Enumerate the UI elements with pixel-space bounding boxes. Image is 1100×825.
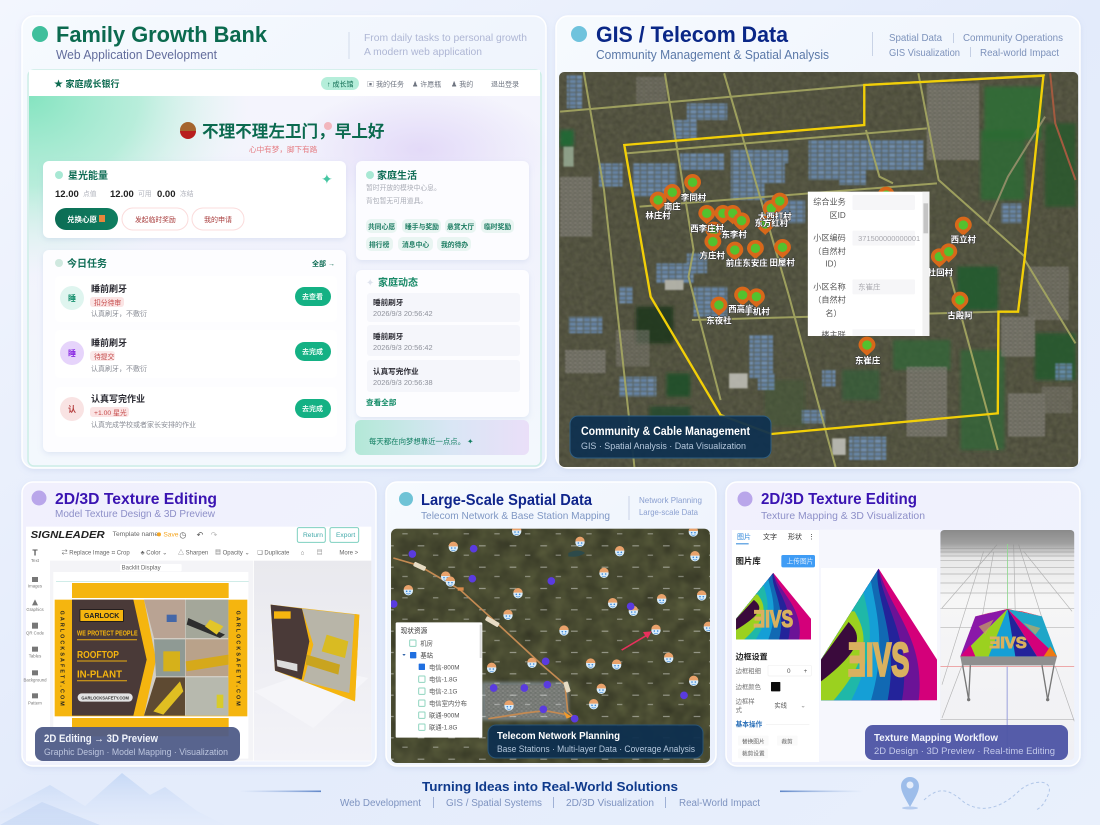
layer legend: 电信-1.8G xyxy=(429,674,458,683)
village labels: 大西打村 xyxy=(758,211,792,221)
village labels: 前庄 xyxy=(726,258,743,268)
info popup: 371500000000001 xyxy=(858,234,920,243)
icon: location pin with route xyxy=(901,777,1049,810)
side tools: Text xyxy=(31,558,40,563)
tags: Real-world Impact xyxy=(980,48,1059,59)
tags: Large-scale Data xyxy=(639,507,698,517)
editor toolbar: Template name xyxy=(113,531,158,538)
tags: Network Planning xyxy=(639,495,702,505)
card: 星光能量: 点值 xyxy=(83,189,97,198)
capability list xyxy=(340,797,760,809)
editor toolbar: ▦ Opacity ⌄ xyxy=(215,549,250,556)
card: 家庭动态: 家庭动态 xyxy=(378,276,418,289)
layer legend: 电信-2.1G xyxy=(429,686,458,695)
image library sidebar: 上传图片 xyxy=(787,556,813,565)
capability list: Real-World Impact xyxy=(679,798,760,809)
markers xyxy=(650,174,972,356)
card: 家庭动态 xyxy=(356,270,529,417)
side tools: Graphics xyxy=(26,607,44,612)
icon: purple dot xyxy=(32,490,46,506)
icon: teal dot xyxy=(399,492,413,506)
card: 家庭生活: 暂时开放的模块中心息。 xyxy=(366,183,441,192)
village labels: 方庄村 xyxy=(700,251,725,261)
greeting xyxy=(180,122,385,154)
layer legend: 联通-1.8G xyxy=(429,722,458,731)
poster: IN-PLANT xyxy=(77,670,122,681)
card: 家庭生活: 消息中心 xyxy=(402,240,429,249)
editor toolbar: ❏ Duplicate xyxy=(257,549,290,556)
card: 家庭生活: 我的待办 xyxy=(441,240,468,249)
layer legend: 现状资源 xyxy=(401,626,428,635)
footer xyxy=(0,773,1049,825)
info popup: 名） xyxy=(825,308,842,318)
arrow xyxy=(621,631,652,651)
village labels: 林庄村 xyxy=(645,211,671,221)
card: 星光能量: 冻结 xyxy=(180,189,194,198)
caption: 2D Editing → 3D Preview xyxy=(44,733,158,745)
image library sidebar: 裁剪设置 xyxy=(742,750,765,758)
card: 家庭生活: 睡手与奖励 xyxy=(405,222,439,231)
image library sidebar: 边框粗细 xyxy=(736,666,761,675)
info popup: 小区名称 xyxy=(813,281,846,291)
image library sidebar: 图片库 xyxy=(736,556,761,566)
caption: 2D Design · 3D Preview · Real-time Editing xyxy=(874,746,1055,757)
3D tent preview xyxy=(940,530,1074,760)
capability list: Web Development xyxy=(340,798,421,809)
map caption: Community & Cable Management xyxy=(581,426,750,438)
caption: Base Stations · Multi-layer Data · Coverage Analysis xyxy=(497,744,695,754)
card: 今日任务 xyxy=(43,250,346,452)
image library sidebar: + xyxy=(804,668,808,675)
image library sidebar: ⋮ xyxy=(808,534,815,541)
3D preview xyxy=(254,561,371,761)
app navbar: ♟ 许愿瓶 xyxy=(412,80,441,88)
panel: GIS / Telecom Data xyxy=(556,16,1080,468)
task 2: 待提交 xyxy=(94,352,115,361)
panel: 2D/3D Texture Editing (tent) xyxy=(726,482,1080,766)
tags xyxy=(628,495,702,520)
task 3: 认真写完作业 xyxy=(91,393,145,404)
caption: Telecom Network Planning xyxy=(497,730,620,742)
layer legend: 电信-800M xyxy=(429,662,460,671)
card: 星光能量 xyxy=(43,161,346,238)
editor toolbar: ↷ xyxy=(211,530,218,539)
heading: closing line: Turning Ideas into Real-World Solutions xyxy=(422,779,678,794)
card: 家庭生活: 背包暂无可用道具。 xyxy=(366,196,427,205)
task 2: 睡前刷牙 xyxy=(91,337,127,348)
info popup: （自然村 xyxy=(813,246,846,256)
canvas xyxy=(50,561,253,761)
editor toolbar: More > xyxy=(339,550,359,556)
task 3: 认 xyxy=(68,404,76,414)
app navbar xyxy=(29,70,540,96)
village labels: 东夜社 xyxy=(706,315,732,325)
village labels: 手机村 xyxy=(744,307,770,317)
village labels: 东崔庄 xyxy=(855,355,881,365)
tags: Spatial Data xyxy=(889,33,942,44)
editor toolbar: △ Sharpen xyxy=(178,548,208,556)
card: 星光能量: 12.00 xyxy=(55,189,79,200)
editor toolbar: ↶ xyxy=(197,530,204,539)
card: 家庭动态: 2026/9/3 20:56:42 xyxy=(373,343,433,352)
capability list: GIS / Spatial Systems xyxy=(446,798,542,809)
task 1: 扣分待审 xyxy=(94,298,121,307)
village labels: 东方红村 xyxy=(754,218,789,228)
description: From daily tasks to personal growth xyxy=(364,32,527,44)
decoration: mountains xyxy=(0,773,225,825)
village labels: 西立村 xyxy=(951,235,977,245)
card: 今日任务: 今日任务 xyxy=(67,257,107,270)
task 1: 睡前刷牙 xyxy=(91,283,127,294)
card: 星光能量: 12.00 xyxy=(110,189,134,200)
info popup: 小区编码 xyxy=(813,233,846,243)
card: 家庭动态: ✦ xyxy=(366,278,374,289)
banner xyxy=(355,420,529,455)
image library sidebar: 文字 xyxy=(763,532,777,541)
icon: blue dot xyxy=(571,26,587,42)
poster: GARLOCK xyxy=(84,611,120,620)
card: 家庭动态: 2026/9/3 20:56:38 xyxy=(373,378,433,387)
info popup: （自然村 xyxy=(813,295,846,305)
app navbar: ↑ 成长馆 xyxy=(327,80,353,88)
image library sidebar: 边框颜色 xyxy=(736,682,762,691)
village labels: 西高庄 xyxy=(728,304,754,314)
card: 星光能量: 星光能量 xyxy=(68,169,108,182)
image library sidebar: 边框样 xyxy=(736,696,755,705)
image library sidebar: 边框设置 xyxy=(736,652,768,662)
base stations xyxy=(404,526,713,711)
task 2: 去完成 xyxy=(302,347,323,356)
tags: Community Operations xyxy=(963,33,1063,44)
poster: GARLOCKSAFETY.COM xyxy=(59,611,65,706)
tags: GIS Visualization xyxy=(889,48,960,59)
app navbar: ♟ 我的 xyxy=(451,80,473,88)
task 3: +1.00 星光 xyxy=(94,408,127,417)
app navbar: ★ 家庭成长银行 xyxy=(54,78,120,89)
info popup: 区ID xyxy=(829,211,846,220)
editor toolbar: ⇄ Replace Image xyxy=(62,548,110,556)
info popup xyxy=(808,192,930,339)
caption: Texture Mapping Workflow xyxy=(874,732,999,744)
editor toolbar: Return xyxy=(303,532,323,539)
image library sidebar: 式 xyxy=(736,705,743,714)
image library sidebar: 实线 xyxy=(774,700,788,709)
app screenshot xyxy=(28,70,550,466)
village labels: 东李村 xyxy=(721,229,747,239)
card: 星光能量: 发起临时奖励 xyxy=(135,215,176,224)
boundary xyxy=(624,76,1043,434)
image library sidebar: 0 xyxy=(787,668,791,675)
side tools: T xyxy=(32,548,38,558)
layer legend: 联通-900M xyxy=(429,710,460,719)
flat texture xyxy=(821,568,937,701)
side tools: Tables xyxy=(29,654,41,659)
village labels: 东安庄 xyxy=(742,258,768,268)
editor toolbar: ♣ Color ⌄ xyxy=(141,550,167,556)
heading: 2D/3D Texture Editing xyxy=(55,491,217,508)
roads xyxy=(560,72,1076,467)
panel: Large-Scale Spatial Data xyxy=(386,482,716,766)
layer legend xyxy=(396,622,482,738)
card: 家庭动态: 2026/9/3 20:56:42 xyxy=(373,309,433,318)
heading: Large-Scale Spatial Data xyxy=(421,492,592,509)
poster xyxy=(55,583,247,736)
card: 家庭动态: 查看全部 xyxy=(366,397,397,407)
village labels: 李同村 xyxy=(681,193,707,203)
image library sidebar: 基本操作 xyxy=(736,720,763,729)
card: 家庭生活: 共同心愿 xyxy=(368,222,395,231)
image library sidebar: 替换图片 xyxy=(742,737,765,745)
roads xyxy=(393,558,575,719)
banner: 每天都在向梦想靠近一点点。 ✦ xyxy=(369,437,473,446)
village labels: 南庄 xyxy=(664,201,681,211)
editor screenshot: Backlit Display xyxy=(122,566,161,572)
subheading: Web Application Development xyxy=(56,48,217,62)
task 1: 睡 xyxy=(68,293,76,303)
editor toolbar: ◷ xyxy=(179,530,186,539)
village labels: 古殿阿 xyxy=(947,311,973,321)
task 3 xyxy=(55,387,337,437)
description xyxy=(364,32,527,58)
satellite map xyxy=(559,72,1078,467)
editor toolbar: Export xyxy=(336,532,355,539)
side tools: Images xyxy=(28,584,42,589)
editor toolbar: Save xyxy=(163,531,179,538)
card: 今日任务: 全部 → xyxy=(312,259,335,268)
caption xyxy=(865,725,1068,760)
tent canopy: ƎIVS xyxy=(989,635,1027,652)
capability list: 2D/3D Visualization xyxy=(566,798,654,809)
info popup: 楼主联 xyxy=(821,329,846,339)
subheading: Telecom Network & Base Station Mapping xyxy=(421,510,610,522)
greeting: 不理不理左卫门，早上好 xyxy=(202,122,385,141)
side tools xyxy=(23,548,47,706)
app navbar: 退出登录 xyxy=(491,80,519,88)
subheading: Model Texture Design & 3D Preview xyxy=(55,508,215,520)
poster: WE PROTECT PEOPLE xyxy=(77,631,138,638)
app navbar: ▣ 我的任务 xyxy=(367,80,404,88)
card: 星光能量: 兑换心愿 xyxy=(67,214,97,224)
village labels: 西李庄村 xyxy=(690,223,725,233)
task 1 xyxy=(55,276,337,322)
card: 星光能量: ✦ xyxy=(321,171,333,187)
layer legend: 电信室内分布 xyxy=(429,698,467,707)
card: 家庭生活 xyxy=(356,161,529,260)
card: 星光能量: 0.00 xyxy=(157,189,176,200)
icon: purple dot xyxy=(738,492,752,506)
side tools: Pattern xyxy=(28,701,43,706)
caption xyxy=(488,725,703,758)
task 3: 认真完成学校或者家长安排的作业 xyxy=(91,420,196,429)
info popup: 综合业务 xyxy=(813,197,846,207)
card: 家庭生活: 临时奖励 xyxy=(484,222,511,231)
task 1: 认真刷牙，不敷衍 xyxy=(91,309,147,318)
poster: GARLOCKSAFETY.COM xyxy=(81,695,129,701)
card: 家庭动态: 睡前刷牙 xyxy=(373,331,404,341)
card: 家庭生活: 家庭生活 xyxy=(377,169,417,182)
card: 家庭生活: 排行榜 xyxy=(369,240,390,249)
heading: 2D/3D Texture Editing xyxy=(761,491,917,508)
task 1: 去查看 xyxy=(302,292,323,301)
tags xyxy=(872,32,1063,59)
card: 家庭动态: 认真写完作业 xyxy=(373,366,419,376)
greeting: 心中有梦，脚下有路 xyxy=(249,144,318,154)
task 2: 睡 xyxy=(68,348,76,358)
subheading: Texture Mapping & 3D Visualization xyxy=(761,510,925,522)
map caption xyxy=(570,416,771,458)
caption xyxy=(35,727,240,761)
description: A modern web application xyxy=(364,46,482,58)
info popup: 东崔庄 xyxy=(858,282,881,291)
village labels: 田屋村 xyxy=(769,257,795,267)
side tools: QR Code xyxy=(26,630,45,635)
image library sidebar: 裁剪 xyxy=(781,737,793,745)
image library sidebar xyxy=(732,530,819,762)
info popup: ID） xyxy=(825,260,842,269)
image library sidebar: ƎIVS xyxy=(753,605,793,632)
subheading: Community Management & Spatial Analysis xyxy=(596,48,829,62)
image library sidebar: ⌄ xyxy=(800,702,806,709)
panel: 2D/3D Texture Editing (poster) xyxy=(22,482,376,766)
editor screenshot xyxy=(23,527,371,761)
tent canopy xyxy=(960,609,1057,701)
icon: green dot xyxy=(32,26,48,42)
heading: Family Growth Bank: Family Growth Bank xyxy=(56,22,268,47)
terrain map xyxy=(390,526,713,763)
poster: ROOFTOP xyxy=(77,650,119,661)
card: 家庭动态: 睡前刷牙 xyxy=(373,297,404,307)
editor toolbar xyxy=(31,528,359,556)
flat texture: ƎIVS xyxy=(848,633,909,685)
map caption: GIS · Spatial Analysis · Data Visualization xyxy=(581,441,746,452)
heading: GIS / Telecom Data: GIS / Telecom Data xyxy=(596,22,789,47)
purple nodes xyxy=(390,545,688,722)
image library sidebar: 图片 xyxy=(737,532,751,541)
card: 家庭生活: 悬赏大厅 xyxy=(447,222,474,231)
editor toolbar: ▤ xyxy=(317,549,323,556)
layer legend: 基站 xyxy=(420,650,434,659)
editor toolbar: SIGNLEADER xyxy=(31,530,106,541)
image library sidebar: 形状 xyxy=(788,532,802,541)
editor toolbar: ⌂ xyxy=(301,550,305,556)
layer legend: 机房 xyxy=(420,638,433,647)
village labels xyxy=(645,193,977,365)
panel: Family Growth Bank xyxy=(22,16,550,468)
poster: GARLOCKSAFETY.COM xyxy=(235,611,241,706)
editor toolbar: ⌗ Crop xyxy=(112,550,130,556)
side tools: Background xyxy=(23,678,47,683)
task 3: 去完成 xyxy=(302,404,323,413)
card: 星光能量: 可用 xyxy=(138,190,152,198)
village labels: 杜回村 xyxy=(928,267,954,277)
caption: Graphic Design · Model Mapping · Visualization xyxy=(44,747,228,758)
card: 星光能量: 我的申请 xyxy=(204,215,232,224)
task 2 xyxy=(55,330,337,378)
task 2: 认真刷牙，不敷衍 xyxy=(91,364,147,373)
